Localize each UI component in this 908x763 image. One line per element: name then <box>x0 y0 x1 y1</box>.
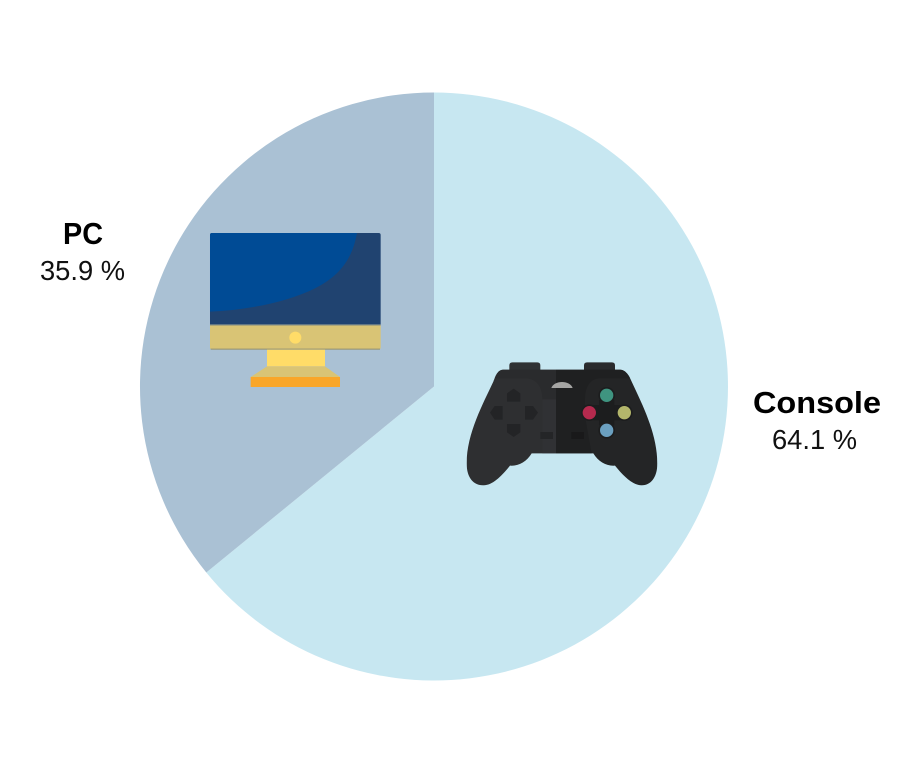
menu buttons <box>540 432 553 439</box>
controller body <box>463 367 663 490</box>
center left panel <box>542 453 556 454</box>
icon: computer monitor <box>210 233 381 387</box>
monitor screen <box>210 233 381 324</box>
monitor neck <box>267 350 325 366</box>
right half <box>556 370 658 486</box>
label: PC <box>40 216 125 286</box>
shoulder buttons <box>509 362 540 370</box>
d-pad <box>490 389 538 437</box>
monitor chin <box>210 324 381 350</box>
PC value: 35.9 % <box>40 255 125 286</box>
left half <box>463 367 556 490</box>
pie slice: Console 64.1% <box>206 92 728 681</box>
guide button <box>551 382 573 388</box>
PC name: PC <box>63 216 103 251</box>
left top band <box>494 370 556 378</box>
right top band <box>556 370 630 454</box>
Console name: Console <box>753 385 881 420</box>
power button <box>289 332 301 344</box>
stand slope <box>251 366 340 377</box>
Console value: 64.1 % <box>772 424 857 455</box>
screen highlight <box>210 233 357 312</box>
icon: game controller <box>463 362 663 490</box>
face button well <box>581 387 633 439</box>
face buttons <box>600 389 613 402</box>
stand base <box>251 377 340 387</box>
label: Console <box>753 385 881 455</box>
pie chart infographic <box>41 92 880 680</box>
pie slice: PC 35.9% <box>140 92 434 572</box>
